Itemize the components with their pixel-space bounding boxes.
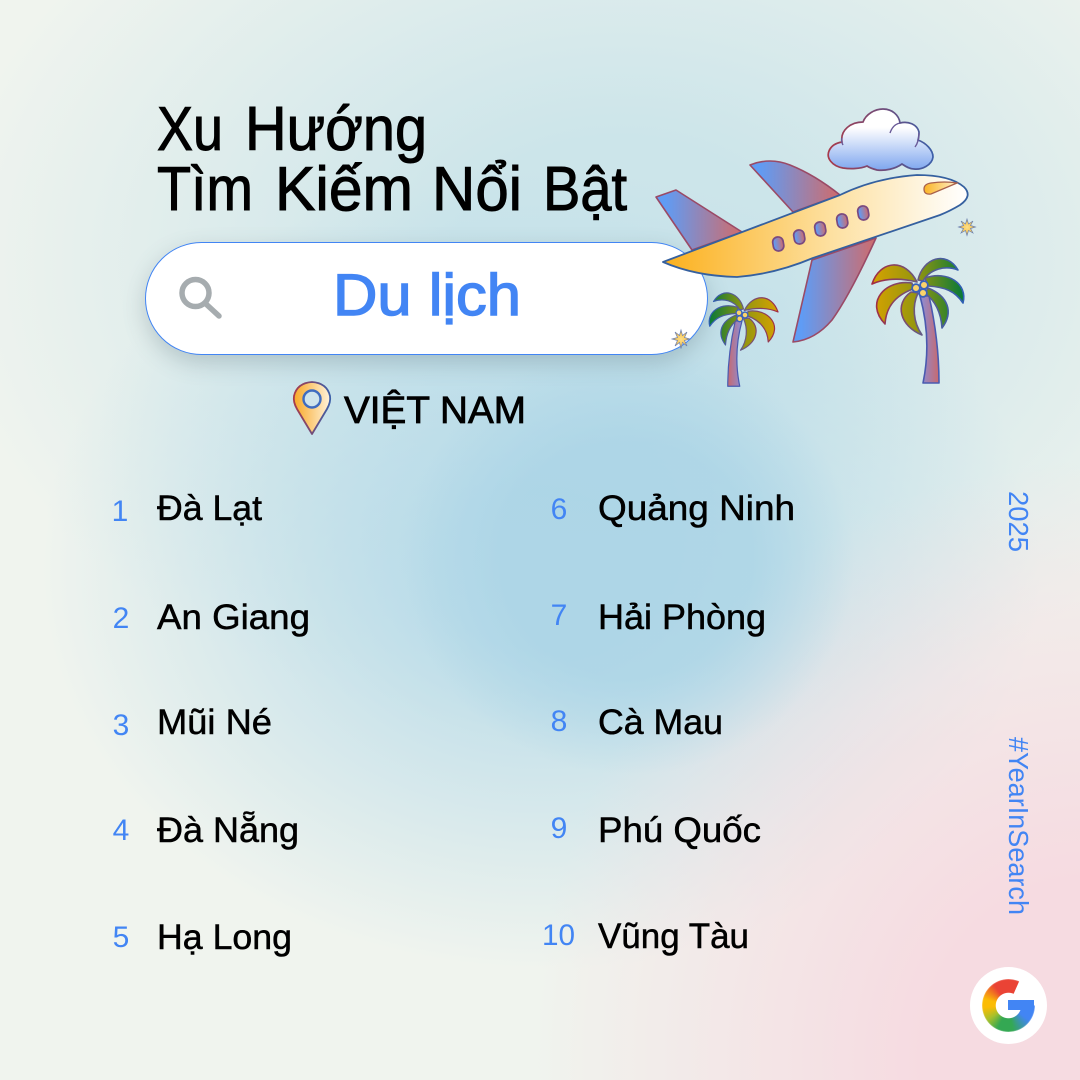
title [157, 95, 627, 224]
title: Hướng [245, 95, 427, 164]
location label: VIỆT NAM [344, 389, 526, 432]
item 5: Hạ Long [157, 918, 292, 957]
plane upper wing [750, 161, 840, 212]
plane cockpit window [924, 182, 957, 194]
item 3: 3 [113, 709, 129, 742]
hashtag: #YearInSearch [1003, 737, 1034, 915]
item 2: 2 [113, 602, 129, 635]
icon: cloud [828, 109, 933, 170]
search term: Du lịch [333, 263, 521, 328]
item 8: Cà Mau [598, 703, 723, 742]
item 3: Mũi Né [157, 703, 272, 742]
search bar [145, 242, 708, 355]
year label: 2025 [1003, 491, 1034, 552]
title: Tìm [157, 155, 253, 224]
plane fuselage [663, 175, 968, 277]
icon: sparkle right [958, 219, 976, 236]
item 5: 5 [113, 921, 129, 954]
ranked list: left column [112, 489, 310, 957]
plane windows [772, 205, 870, 252]
illustration: airplane with cloud and palms [656, 109, 976, 386]
item 1 [112, 489, 262, 528]
item 1: 1 [112, 495, 128, 528]
item 4: Đà Nẵng [157, 811, 299, 850]
item 7: Hải Phòng [598, 598, 766, 637]
plane tail fin [656, 190, 742, 250]
item 6: Quảng Ninh [598, 489, 795, 528]
item 3 [113, 703, 272, 742]
item 10: Vũng Tàu [598, 917, 749, 956]
icon: search magnifier [182, 280, 219, 316]
icon: left palm tree [709, 293, 778, 386]
ranked list: right column [542, 489, 795, 956]
item 6: 6 [551, 493, 567, 526]
title: Kiếm [275, 155, 413, 224]
item 2: An Giang [157, 598, 310, 637]
icon: Google G logo [970, 967, 1047, 1044]
item 7: 7 [551, 599, 567, 632]
item 10: 10 [542, 919, 575, 952]
icon: location pin [294, 382, 330, 434]
icon: right palm tree [872, 259, 964, 383]
title: Nổi [432, 155, 522, 224]
item 1: Đà Lạt [157, 489, 262, 528]
icon: sparkle left [672, 330, 690, 348]
title: Bật [543, 155, 627, 224]
item 9: Phú Quốc [598, 811, 761, 850]
item 8: 8 [551, 705, 567, 738]
item 9: 9 [551, 812, 567, 845]
title: Xu [157, 95, 223, 164]
plane lower wing [793, 238, 876, 342]
item 4: 4 [113, 814, 129, 847]
